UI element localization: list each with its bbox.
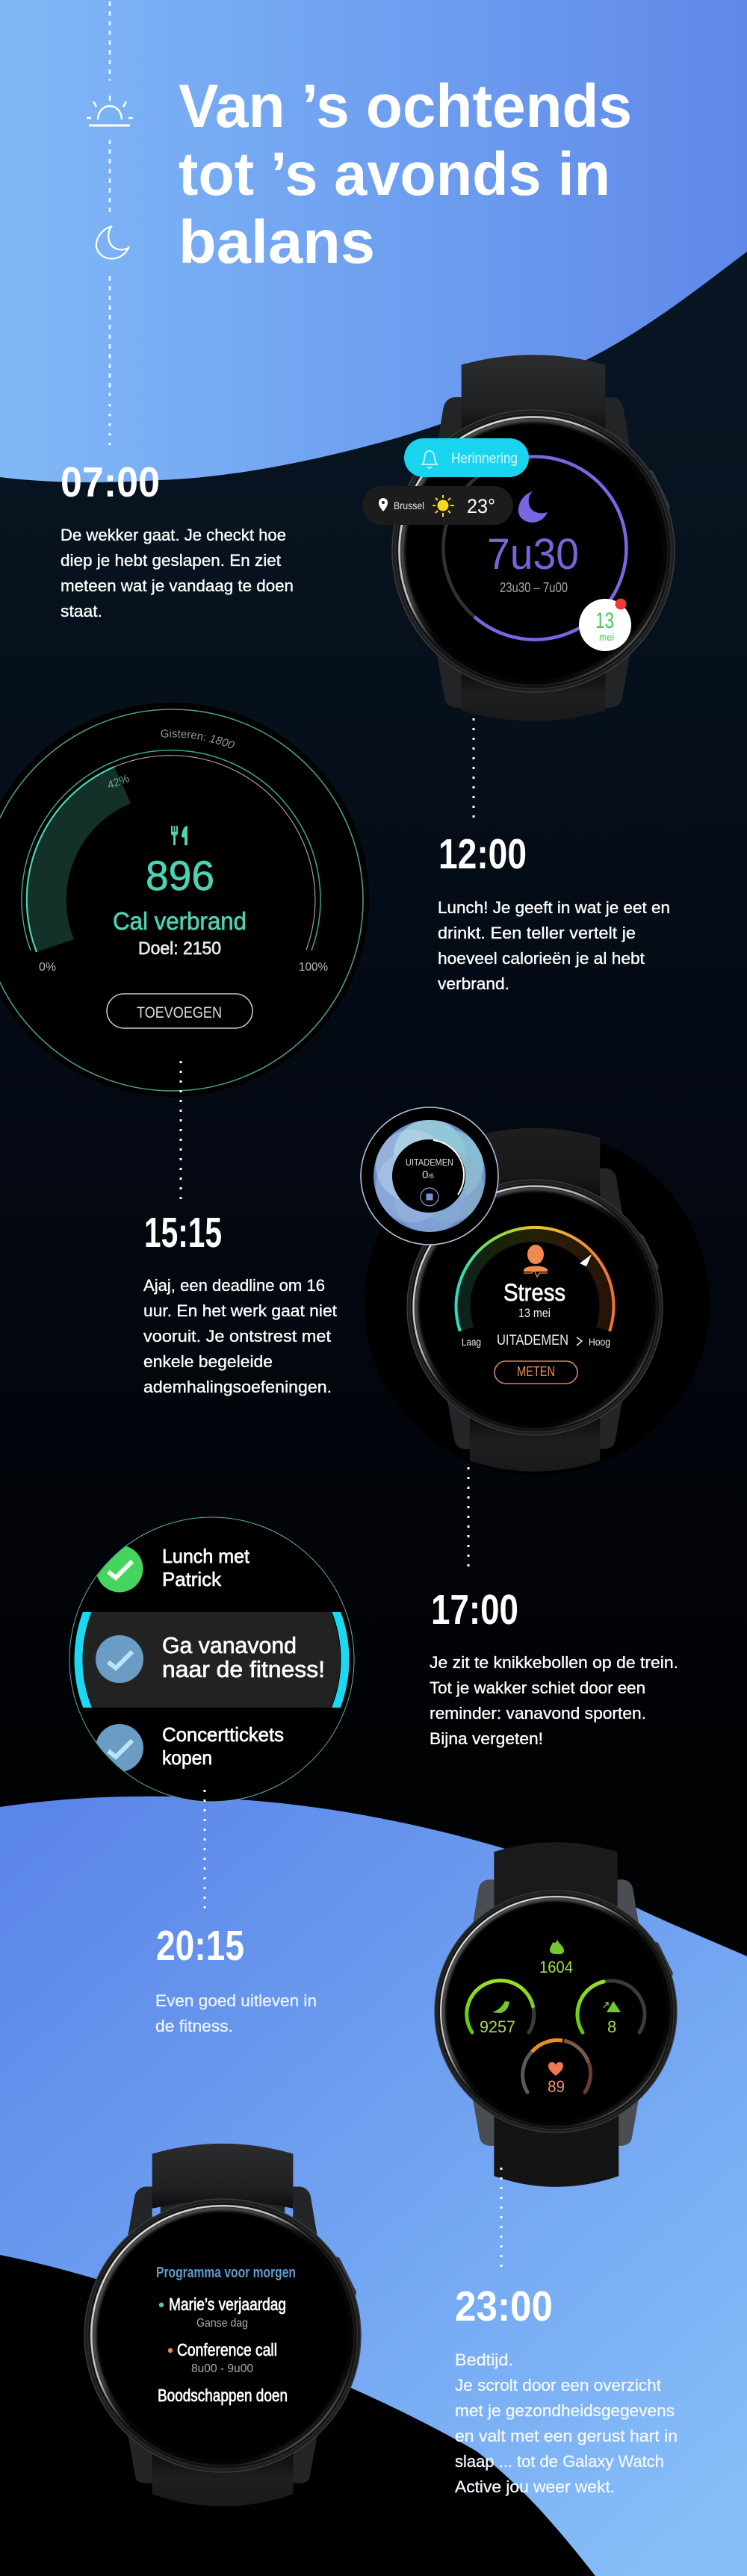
steps value: 9257	[480, 2017, 515, 2036]
dashed timeline	[109, 1, 111, 396]
stop button	[421, 1188, 438, 1206]
reminder pill	[404, 438, 529, 477]
scale labels: 0%	[39, 961, 56, 974]
sleep range: 23u30 – 7u00	[500, 580, 568, 595]
heart rate arc	[523, 2040, 591, 2092]
20:15 heading: 20:15	[156, 1922, 244, 1970]
12:00 heading: 12:00	[438, 830, 527, 878]
stress gauge	[456, 1228, 614, 1331]
dotted line to 12:00	[472, 718, 475, 818]
gauge labels	[462, 1333, 610, 1348]
icon: person	[524, 1245, 548, 1277]
dotted line to 20:15	[203, 1790, 206, 1908]
to-do labels: kopen	[162, 1746, 212, 1769]
23:00 text: Bedtijd.	[455, 2351, 513, 2369]
17:00 text: reminder: vanavond sporten.	[430, 1704, 646, 1723]
17:00 heading: 17:00	[431, 1586, 518, 1634]
highlight band	[75, 1612, 350, 1708]
calorie label: Cal verbrand	[113, 907, 247, 935]
date badge	[579, 599, 631, 651]
watch body	[407, 1128, 663, 1472]
breathing inset	[361, 1107, 498, 1245]
to-do labels: Lunch met	[162, 1545, 250, 1567]
event: call: Conference call	[177, 2340, 277, 2359]
15:15 text: uur. En het werk gaat niet	[143, 1301, 338, 1320]
reminder pill: Herinnering	[451, 451, 518, 467]
17:00 text: Tot je wakker schiet door een	[430, 1679, 645, 1697]
add button	[107, 994, 252, 1028]
steps arc	[467, 1980, 534, 2032]
watch body	[84, 2144, 361, 2507]
breath label: UITADEMEN	[406, 1157, 453, 1168]
23:00 text: slaap ... tot de Galaxy Watch	[455, 2452, 664, 2471]
blue bottom shape	[0, 1796, 747, 2576]
to-do labels: Patrick	[162, 1568, 222, 1590]
icon: moon	[96, 226, 128, 258]
17:00 text	[430, 1653, 678, 1748]
icon: heart	[548, 2062, 563, 2076]
yesterday label: Gisteren: 1800	[161, 729, 235, 748]
gauge labels: Laag	[462, 1336, 481, 1348]
dotted line to 17:00	[468, 1467, 469, 1567]
15:15 text: Ajaj, een deadline om 16	[143, 1276, 325, 1295]
breath count: 0/6	[422, 1169, 434, 1181]
event: call	[168, 2340, 277, 2375]
progress rings	[22, 750, 320, 952]
stress label: Stress	[503, 1279, 565, 1306]
17:00 text: Bijna vergeten!	[430, 1729, 543, 1748]
event: shopping: Boodschappen doen	[158, 2386, 288, 2405]
23:00 text: en valt met een gerust hart in	[455, 2427, 678, 2445]
watch: sleep	[362, 355, 675, 721]
calorie watch face	[0, 703, 369, 1097]
scale labels	[39, 961, 328, 974]
add button: TOEVOEGEN	[137, 1004, 222, 1021]
to-do watch face	[69, 1517, 354, 1802]
petal ring	[374, 1120, 486, 1232]
17:00 text: Je zit te knikkebollen op de trein.	[430, 1653, 678, 1672]
icon: flame	[550, 1939, 564, 1954]
watch: stress	[365, 1128, 710, 1475]
icon: sunrise	[87, 96, 133, 125]
to-do labels	[162, 1545, 325, 1769]
check icons	[96, 1546, 143, 1772]
measure button	[495, 1361, 577, 1384]
blue top shape	[0, 0, 747, 482]
12:00 text: drinkt. Een teller vertelt je	[438, 924, 636, 942]
dotted line after timeline	[108, 404, 111, 445]
goal: Doel: 2150	[138, 939, 221, 959]
icon: mountain	[604, 2001, 621, 2012]
black halo	[365, 1130, 710, 1475]
07:00 text: De wekker gaat. Je checkt hoe	[61, 526, 286, 544]
dotted line to 23:00	[500, 2168, 502, 2271]
15:15 text: ademhalingsoefeningen.	[143, 1378, 332, 1396]
dotted line to 15:15	[179, 1061, 182, 1201]
gauge labels: Hoog	[589, 1336, 610, 1348]
12:00 text	[438, 898, 670, 993]
23:00 text: Je scrolt door een overzicht	[455, 2376, 662, 2395]
weather pill: Brussel	[394, 500, 424, 511]
event: birthday: Marie’s verjaardag	[169, 2295, 286, 2314]
progress band	[27, 767, 131, 952]
title: tot ’s avonds in	[179, 140, 610, 208]
weather pill	[362, 486, 513, 525]
scale labels: 100%	[299, 961, 328, 974]
12:00 text: hoeveel calorieën je al hebt	[438, 949, 645, 968]
floors value: 8	[607, 2017, 616, 2036]
breath progress arc	[433, 1140, 464, 1195]
percent label: 42%	[106, 772, 131, 792]
heart rate value: 89	[548, 2077, 565, 2096]
gauge labels: UITADEMEN	[497, 1333, 568, 1348]
watch: calendar	[84, 2144, 361, 2507]
event: call: 8u00 - 9u00	[191, 2362, 253, 2375]
07:00 text: meteen wat je vandaag te doen	[61, 576, 294, 595]
icon: purple moon	[518, 491, 548, 523]
07:00 text	[61, 526, 294, 620]
watch body	[392, 355, 675, 721]
title	[179, 72, 632, 276]
to-do labels: Ga vanavond	[162, 1632, 297, 1658]
to-do labels: Concerttickets	[162, 1723, 284, 1746]
date badge: 13	[595, 609, 614, 633]
gauge pointer	[580, 1254, 592, 1266]
icon: cutlery	[171, 826, 187, 845]
calorie value: 896	[146, 852, 214, 899]
measure button: METEN	[517, 1364, 555, 1379]
sleep time: 7u30	[487, 530, 579, 579]
23:00 text: met je gezondheidsgegevens	[455, 2401, 675, 2420]
15:15 heading: 15:15	[144, 1209, 222, 1257]
23:00 text: Active jou weer wekt.	[455, 2477, 615, 2496]
07:00 text: diep je hebt geslapen. En ziet	[61, 551, 282, 570]
20:15 text: de fitness.	[155, 2017, 233, 2035]
15:15 text	[143, 1276, 338, 1396]
event: birthday: Ganse dag	[196, 2317, 248, 2330]
date badge: mei	[599, 631, 614, 643]
calendar heading: Programma voor morgen	[156, 2265, 296, 2281]
23:00 text	[455, 2351, 678, 2496]
20:15 text	[155, 1991, 317, 2035]
calories value: 1604	[539, 1958, 573, 1976]
07:00 text: staat.	[61, 602, 102, 620]
15:15 text: enkele begeleide	[143, 1352, 273, 1371]
title: balans	[179, 208, 375, 276]
icon: shoe	[492, 2001, 509, 2013]
sleep ring	[443, 457, 626, 640]
23:00 heading: 23:00	[455, 2283, 553, 2330]
title: Van ’s ochtends	[179, 72, 632, 140]
watch body	[435, 1842, 677, 2187]
12:00 text: verbrand.	[438, 974, 509, 993]
20:15 text: Even goed uitleven in	[155, 1991, 317, 2010]
weather pill: 23°	[467, 495, 495, 517]
floors arc	[577, 1981, 645, 2032]
to-do labels: naar de fitness!	[162, 1656, 325, 1682]
15:15 text: vooruit. Je ontstrest met	[143, 1327, 332, 1345]
12:00 text: Lunch! Je geeft in wat je eet en	[438, 898, 670, 917]
event: birthday	[159, 2295, 286, 2330]
stress date: 13 mei	[518, 1306, 551, 1320]
watch: activity	[435, 1842, 677, 2187]
07:00 heading: 07:00	[61, 458, 160, 506]
